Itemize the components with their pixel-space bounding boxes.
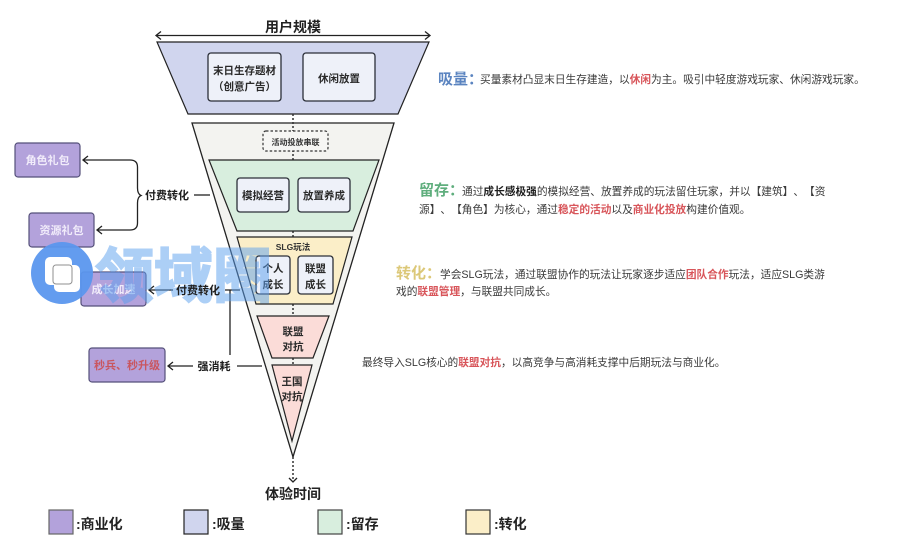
panel: alliance battle: 联盟 [282, 325, 304, 338]
box: character pack: 角色礼包 [26, 153, 70, 167]
connector: consumption to funnel [237, 365, 262, 367]
arrow: time axis [289, 457, 297, 482]
box: alliance growth: 成长 [305, 278, 326, 291]
box: idle [303, 53, 375, 101]
box: simulation: 模拟经营 [242, 189, 284, 202]
arrow: user scale width [156, 32, 430, 40]
text: retention: 留存： [419, 181, 464, 199]
box: alliance growth [298, 256, 333, 294]
text: conversion [396, 264, 825, 298]
legend: acquisition: :吸量 [212, 516, 245, 532]
label: heavy consumption: 强消耗 [198, 359, 230, 373]
text: retention: 通过成长感极强的模拟经营、放置养成的玩法留住玩家，并以【建筑】、【资 [462, 185, 826, 198]
legend: monetization [49, 510, 123, 534]
box: growth boost [81, 272, 146, 306]
legend: conversion: :转化 [494, 516, 527, 532]
box: campaign link [263, 131, 328, 151]
box: doomsday theme [208, 53, 281, 101]
legend: conversion [466, 510, 527, 534]
panel: main funnel [192, 114, 394, 457]
panel: alliance battle: 对抗 [282, 340, 304, 353]
box: personal growth: 成长 [262, 278, 284, 291]
label: paid conversion top: 付费转化 [145, 188, 189, 202]
text: conversion: 转化： [396, 264, 441, 282]
text: final stage: 最终导入SLG核心的联盟对抗，以高竞争与高消耗支撑中后期玩法与商业化。 [362, 356, 725, 369]
connector: paid conversion to funnel [194, 194, 210, 196]
label: SLG gameplay: SLG玩法 [276, 242, 311, 252]
box: simulation [237, 178, 289, 212]
panel: kingdom battle: 王国 [282, 376, 302, 388]
box: doomsday theme: 末日生存题材 [213, 64, 276, 77]
panel: retention [209, 160, 379, 231]
text: retention [419, 181, 826, 216]
connector: paid conversion lines [225, 290, 240, 355]
label: paid conversion middle: 付费转化 [176, 283, 220, 297]
arrow: brace to packs [83, 156, 141, 234]
legend: acquisition [184, 510, 245, 534]
box: personal growth [256, 256, 290, 294]
text: conversion: 戏的联盟管理，与联盟共同成长。 [396, 285, 556, 298]
box: character pack [15, 143, 80, 177]
text: conversion: 学会SLG玩法，通过联盟协作的玩法让玩家逐步适应团队合作玩法，适应SLG类游 [440, 268, 825, 281]
heading: experience time: 体验时间 [265, 486, 321, 502]
box: campaign link: 活动投放串联 [272, 137, 320, 147]
box: idle: 休闲放置 [318, 72, 360, 85]
connector: dotted line [292, 114, 294, 365]
panel: acquisition funnel [157, 42, 429, 114]
text: acquisition: 吸量： [438, 71, 483, 88]
panel: kingdom battle [272, 365, 312, 441]
panel: conversion [237, 237, 352, 304]
box: doomsday theme: （创意广告） [213, 80, 276, 93]
text: acquisition [438, 71, 865, 88]
heading: user scale: 用户规模 [265, 19, 321, 35]
box: instant troops [89, 348, 165, 382]
panel: alliance battle [257, 316, 329, 358]
arrow: to instant troops [168, 362, 193, 370]
text: acquisition: 买量素材凸显末日生存建造，以休闲为主。吸引中轻度游戏玩家、休闲游戏玩家。 [480, 73, 865, 86]
box: personal growth: 个人 [262, 263, 284, 275]
panel: kingdom battle: 对抗 [282, 390, 303, 403]
legend: retention [318, 510, 379, 534]
box: resource pack [29, 213, 94, 247]
legend: monetization: :商业化 [76, 516, 123, 532]
legend: retention: :留存 [346, 516, 379, 532]
arrow: to growth boost [149, 286, 173, 294]
box: instant troops: 秒兵、秒升级 [94, 358, 160, 372]
box: growth boost: 成长加速 [92, 282, 136, 296]
watermark: 领域圈 [95, 244, 272, 310]
box: alliance growth: 联盟 [305, 262, 326, 275]
box: idle growth [298, 178, 350, 212]
box: idle growth: 放置养成 [303, 189, 345, 202]
box: resource pack: 资源礼包 [40, 223, 84, 237]
text: retention: 源】、【角色】为核心，通过稳定的活动以及商业化投放构建价值观。 [419, 203, 750, 216]
